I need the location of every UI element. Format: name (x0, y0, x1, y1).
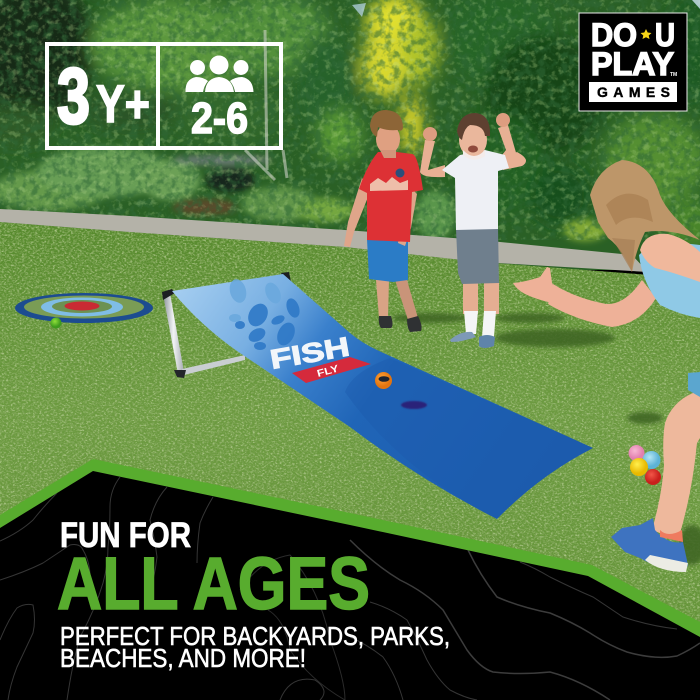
subheading: PERFECT FOR BACKYARDS, PARKS, (60, 623, 450, 651)
heading: fun for: FUN FOR (60, 516, 191, 555)
lawn (0, 222, 700, 622)
hair (590, 160, 700, 272)
bottom panel (0, 459, 700, 700)
mat hole (401, 401, 427, 409)
game logo: FLY (316, 363, 340, 380)
coloured balls (628, 445, 661, 485)
brand logo: U (655, 17, 675, 53)
leg (652, 392, 700, 540)
age label: Y+ (96, 75, 150, 134)
girl throwing (513, 160, 700, 572)
trunks (245, 30, 287, 180)
brand logo: PLAY (591, 46, 674, 82)
heading: all ages: ALL AGES (57, 542, 370, 625)
boy in red shirt (344, 110, 423, 332)
top (639, 240, 700, 318)
subheading: BEACHES, AND MORE! (60, 645, 306, 673)
shoulder (640, 234, 700, 282)
arm and hand (548, 280, 656, 327)
boy in white shirt cheering (420, 113, 526, 348)
icon: players group (185, 56, 254, 92)
player count: 2-6 (191, 94, 248, 143)
brand logo: DO (591, 17, 637, 53)
gravel path (0, 209, 648, 272)
game logo: FISH (268, 331, 352, 375)
sky specks (352, 3, 366, 17)
icon: star (640, 29, 652, 39)
shoe (611, 518, 688, 572)
bushes (0, 147, 607, 241)
frame poles (162, 272, 291, 378)
game logo (268, 331, 371, 383)
darker mat arc (345, 358, 593, 519)
target ring game (15, 293, 153, 328)
stats badge (47, 44, 281, 148)
brand logo (579, 13, 687, 111)
subheading (60, 623, 450, 673)
age label: 3 (57, 51, 90, 140)
school of fish print (227, 277, 302, 350)
brand logo: GAMES (597, 84, 670, 100)
kid shadows on the lawn (392, 313, 700, 565)
age label (57, 51, 150, 140)
photo background: trees and bushes (0, 0, 700, 270)
orange ball (375, 372, 392, 389)
slide mat (172, 274, 593, 519)
brand logo: TM (670, 72, 677, 78)
green ball (50, 318, 62, 328)
fish slide game (162, 272, 593, 519)
